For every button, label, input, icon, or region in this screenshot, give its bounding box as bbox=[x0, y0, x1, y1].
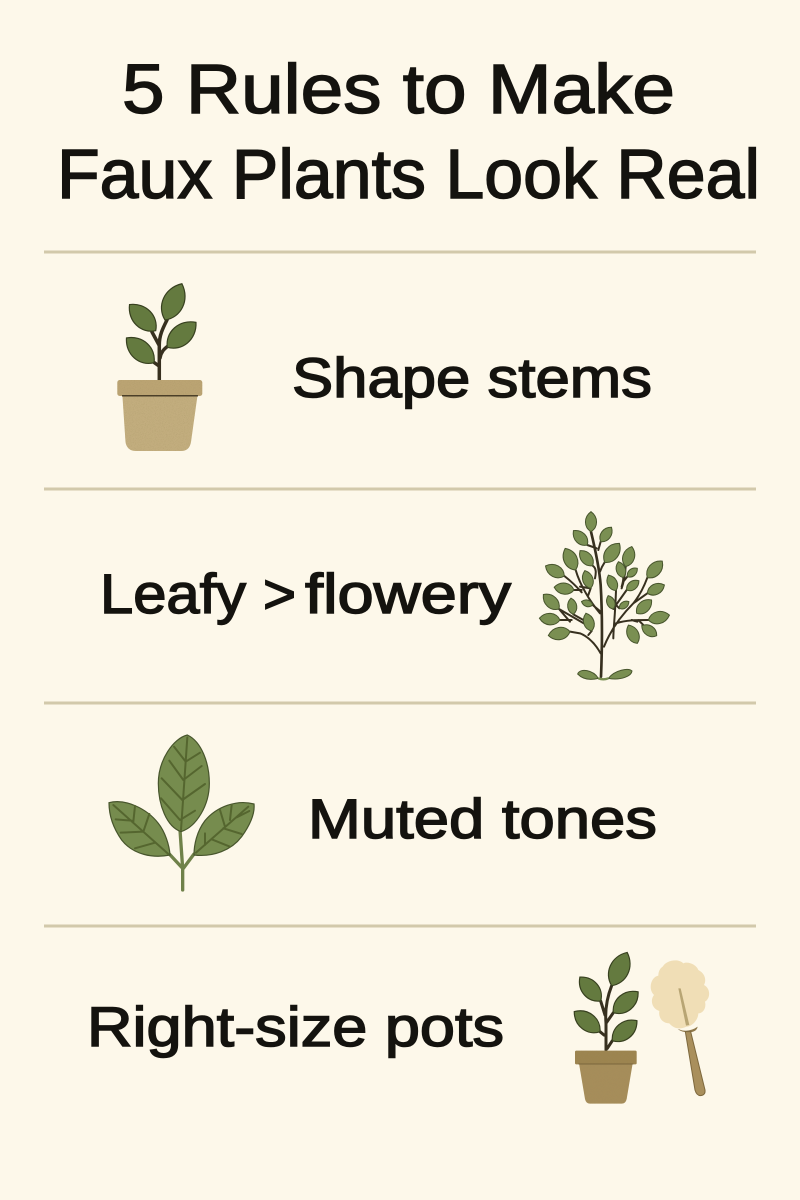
text: shape stems: Shape stems bbox=[292, 346, 652, 409]
text: leafy over flowery: > bbox=[263, 562, 296, 625]
icon: potted plant bbox=[117, 279, 203, 451]
title: 5 Rules to Make bbox=[122, 50, 675, 128]
text: leafy over flowery bbox=[100, 562, 511, 625]
title bbox=[57, 50, 760, 213]
panel: muted tones bbox=[109, 735, 657, 890]
text: leafy over flowery: flowery bbox=[305, 562, 511, 625]
text: muted tones: Muted tones bbox=[308, 787, 657, 850]
title: Faux Plants Look Real bbox=[57, 135, 760, 213]
text: right-size pots: Right-size pots bbox=[87, 995, 504, 1058]
icon: three muted leaves bbox=[109, 735, 254, 890]
panel: leafy over flowery bbox=[100, 512, 671, 679]
panel: right-size pots bbox=[87, 948, 709, 1104]
icon: leafy tree bbox=[539, 512, 671, 679]
text: leafy over flowery: Leafy bbox=[100, 562, 246, 625]
icon: potted plant small bbox=[569, 948, 644, 1104]
icon: feather duster bbox=[651, 960, 709, 1096]
panel: shape stems bbox=[117, 279, 652, 451]
